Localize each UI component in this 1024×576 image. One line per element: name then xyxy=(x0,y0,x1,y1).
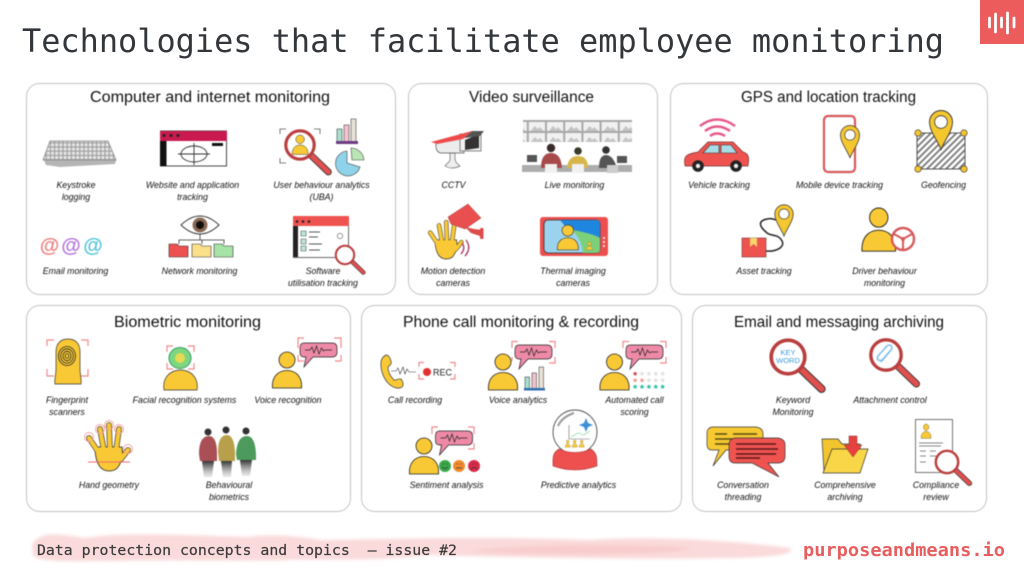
icon: keyword magnifier xyxy=(771,340,822,389)
label: live monitoring: Live monitoring xyxy=(545,180,604,190)
panel: GPS and location tracking xyxy=(670,84,988,294)
label: driver behaviour monitoring: Driver behaviour xyxy=(852,266,918,276)
icon: website tracking window xyxy=(160,131,227,166)
icon: automated call scoring: ★★★★★ xyxy=(632,383,666,391)
icon: asset tracking parcel and pin xyxy=(742,205,793,257)
heading: GPS and location tracking xyxy=(741,89,916,106)
icon: keyword magnifier: KEY xyxy=(780,348,796,357)
icon: email at signs: @ xyxy=(83,235,103,257)
label: keystroke logging: Keystroke xyxy=(56,180,96,190)
icon: email at signs xyxy=(40,235,103,257)
icon: keyword magnifier: WORD xyxy=(776,356,800,365)
icon: facial recognition xyxy=(164,346,197,390)
label: website tracking: tracking xyxy=(177,192,208,202)
footer brush stroke xyxy=(32,534,791,561)
label: thermal imaging cameras: Thermal imaging xyxy=(540,266,606,276)
icon: voice recognition xyxy=(272,338,341,388)
icon: thermal imaging screen xyxy=(540,217,608,256)
label: fingerprint scanners: Fingerprint xyxy=(46,395,89,405)
logo xyxy=(980,0,1024,44)
icon: crystal ball xyxy=(553,410,597,470)
icon: keyboard xyxy=(43,141,116,167)
icon: automated call scoring xyxy=(600,342,666,391)
label: user behaviour analytics: User behaviour analytics xyxy=(273,180,370,190)
icon: email at signs: @ xyxy=(40,235,59,257)
label: keyword monitoring: Monitoring xyxy=(772,407,814,417)
label: predictive analytics: Predictive analytics xyxy=(541,480,617,490)
icon: motion detection hand and camera xyxy=(430,204,484,259)
panel: Phone call monitoring and recording xyxy=(362,306,682,512)
icon: email at signs: @ xyxy=(61,235,81,257)
label: behavioural biometrics: Behavioural xyxy=(206,480,253,490)
heading: Video surveillance xyxy=(469,89,594,106)
label: automated call scoring: scoring xyxy=(620,407,649,417)
label: mobile device tracking: Mobile device tracking xyxy=(796,180,883,190)
heading: Biometric monitoring xyxy=(114,314,261,331)
icon: automated call scoring: ★★★★★ xyxy=(632,376,666,384)
label: sentiment analysis: Sentiment analysis xyxy=(410,480,484,490)
label: behavioural biometrics: biometrics xyxy=(209,492,250,502)
label: fingerprint scanners: scanners xyxy=(49,407,85,417)
label: email monitoring: Email monitoring xyxy=(43,266,108,276)
label: voice analytics: Voice analytics xyxy=(489,395,548,405)
label: motion detection cameras: cameras xyxy=(436,278,470,288)
icon: CCTV camera xyxy=(431,131,484,168)
label: driver behaviour monitoring: monitoring xyxy=(864,278,905,288)
label: compliance review: Compliance xyxy=(913,480,959,490)
heading: Phone call monitoring & recording xyxy=(403,314,639,331)
icon: geofencing area with pin xyxy=(915,110,967,172)
label: network monitoring: Network monitoring xyxy=(162,266,237,276)
label: comprehensive archiving: Comprehensive xyxy=(814,480,876,490)
label: attachment control: Attachment control xyxy=(852,395,928,405)
label: CCTV: CCTV xyxy=(442,180,467,190)
icon: sentiment analysis xyxy=(409,427,480,474)
icon: hand geometry xyxy=(84,420,132,471)
icon: driver and steering wheel xyxy=(862,208,914,251)
icon: conversation bubbles xyxy=(707,427,785,477)
icon: software window with magnifier xyxy=(293,216,363,272)
label: website tracking: Website and application xyxy=(146,180,239,190)
panel: Video surveillance xyxy=(408,84,658,294)
label: automated call scoring: Automated call xyxy=(604,395,665,405)
icon: call recording: REC xyxy=(433,368,453,378)
panel: Email and messaging archiving xyxy=(692,306,986,512)
label: keyword monitoring: Keyword xyxy=(776,395,811,405)
label: compliance review: review xyxy=(923,492,949,502)
heading: Email and messaging archiving xyxy=(734,314,944,331)
label: keystroke logging: logging xyxy=(62,192,90,202)
label: thermal imaging cameras: cameras xyxy=(556,278,590,288)
heading: Computer and internet monitoring xyxy=(90,89,330,106)
icon: fingerprint scanner xyxy=(47,339,88,384)
image: control room live monitoring xyxy=(522,120,632,173)
icon: call recording xyxy=(381,355,455,388)
label: hand geometry: Hand geometry xyxy=(79,480,140,490)
label: software utilisation tracking: utilisation tracking xyxy=(288,278,358,288)
panel: Computer and internet monitoring xyxy=(26,84,396,294)
label: asset tracking: Asset tracking xyxy=(735,266,792,276)
image: walking people xyxy=(199,426,256,477)
label: facial recognition systems: Facial recognition systems xyxy=(133,395,237,405)
icon: user behaviour analytics xyxy=(280,119,364,176)
icon: network eye and folders xyxy=(169,216,233,257)
label: conversation threading: threading xyxy=(725,492,761,502)
icon: folder with arrow xyxy=(822,436,868,473)
label: comprehensive archiving: archiving xyxy=(827,492,863,502)
label: user behaviour analytics: (UBA) xyxy=(310,192,334,202)
label: geofencing: Geofencing xyxy=(921,180,966,190)
label: software utilisation tracking: Software xyxy=(306,266,340,276)
label: voice recognition: Voice recognition xyxy=(254,395,322,405)
label: vehicle tracking: Vehicle tracking xyxy=(688,180,750,190)
icon: mobile device with pin xyxy=(824,116,860,172)
title: Technologies that facilitate employee monitoring xyxy=(22,22,944,60)
icon: attachment magnifier xyxy=(871,340,916,384)
icon: automated call scoring: ★★★★★ xyxy=(632,370,666,378)
panel: Biometric monitoring xyxy=(26,306,350,512)
label: call recording: Call recording xyxy=(388,395,442,405)
icon: car with signal xyxy=(684,120,749,172)
footer website: purposeandmeans.io xyxy=(803,540,1005,561)
icon: compliance document xyxy=(916,420,969,483)
label: motion detection cameras: Motion detection xyxy=(421,266,485,276)
label: conversation threading: Conversation xyxy=(717,480,769,490)
footer caption: Data protection concepts and topics – issue #2 xyxy=(37,543,457,559)
icon: voice analytics xyxy=(488,342,555,390)
